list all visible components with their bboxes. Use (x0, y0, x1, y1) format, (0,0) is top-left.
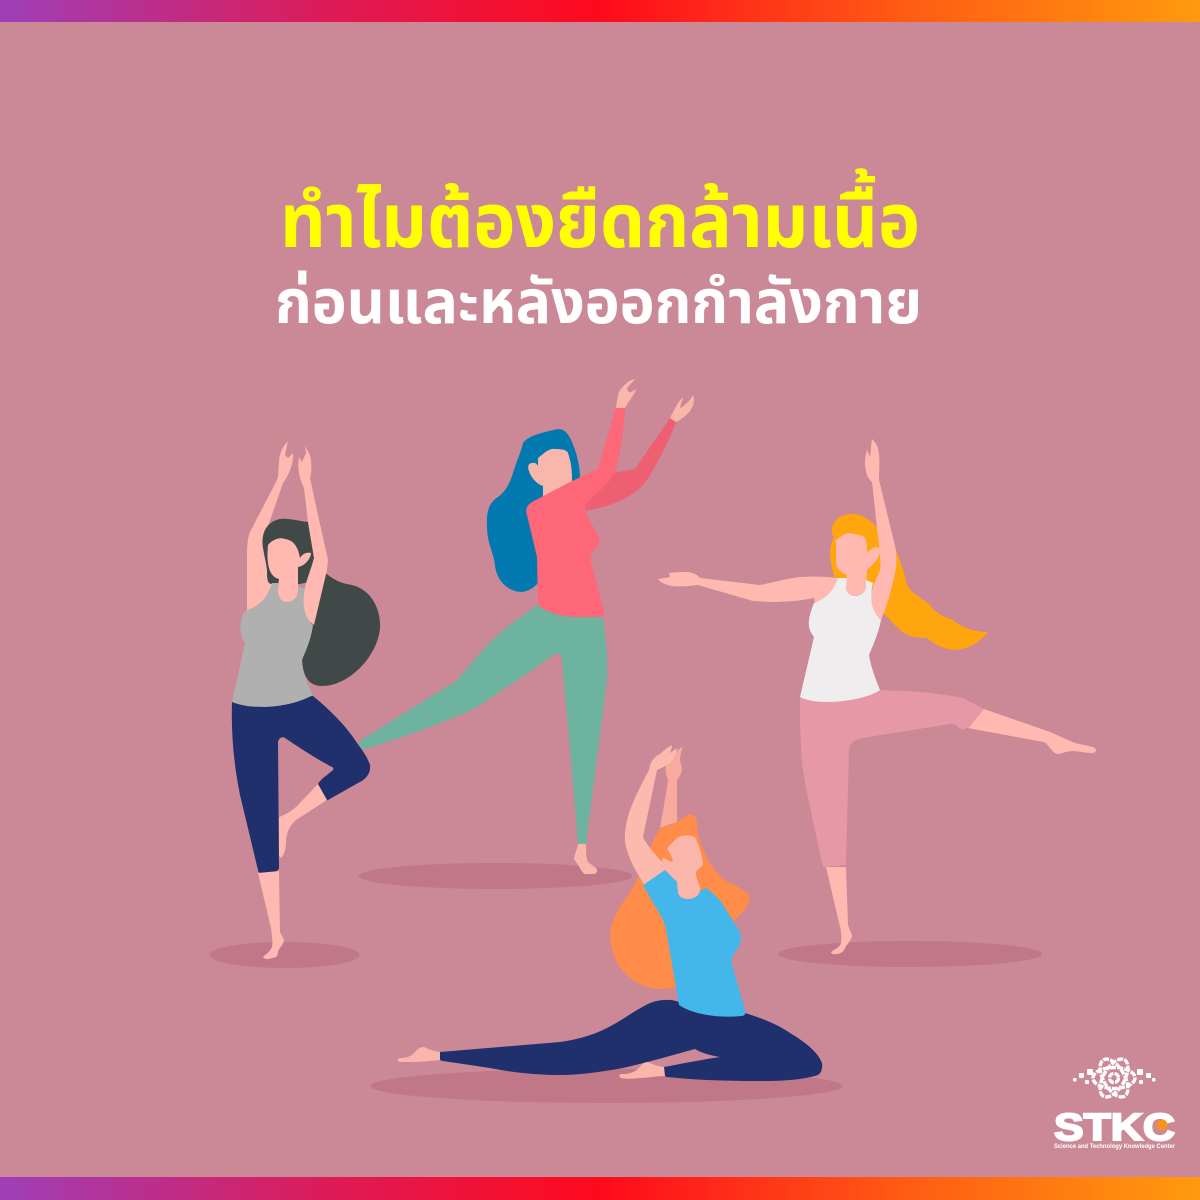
orange hair (830, 514, 988, 650)
logo: atom emblem (1093, 1055, 1135, 1101)
logo: tagline: Science and Technology Knowledge Center (1054, 1144, 1176, 1150)
title (275, 168, 922, 336)
bottom gradient bar (0, 1177, 1200, 1200)
face and ear (267, 538, 311, 602)
hair fringe (650, 816, 695, 862)
hair (487, 429, 580, 592)
pink leggings (800, 690, 984, 867)
figure: woman in white top and pink leggings (658, 439, 1096, 954)
figure: seated woman in blue top (398, 745, 822, 1081)
face and ear (528, 449, 572, 500)
face and neck (660, 835, 703, 899)
front arm (625, 745, 677, 886)
logo: STKC wordmark: STKC (1054, 1107, 1175, 1149)
back arm (584, 418, 676, 511)
right arm (298, 446, 328, 625)
face, neck and ear (836, 533, 880, 596)
white tank top (800, 578, 881, 702)
green leggings (358, 605, 607, 844)
left arm (247, 441, 293, 610)
title line 1: ทำไมต้องยืดกล้ามเนื้อ (280, 168, 920, 264)
floor shadows (210, 863, 1042, 1103)
navy leggings (440, 1000, 822, 1081)
standing leg (258, 871, 284, 959)
STKC logo (1054, 1055, 1176, 1150)
orange hair (610, 814, 749, 989)
standing foot (574, 844, 597, 874)
bent foot (279, 784, 327, 858)
top gradient bar (0, 0, 1200, 22)
figure: woman in coral top and green leggings (358, 379, 694, 874)
navy leggings (232, 696, 370, 873)
coral top (526, 408, 625, 618)
blue top (643, 870, 745, 1017)
left foot (398, 1047, 440, 1062)
back hand (670, 395, 694, 422)
side arm (658, 572, 838, 603)
raised arm (865, 439, 896, 620)
standing leg (826, 867, 852, 954)
raised leg (968, 709, 1096, 754)
logo: orange dot (1156, 1120, 1168, 1130)
grey tank top (232, 583, 313, 707)
back arm (660, 746, 683, 828)
figure: woman in grey top and navy leggings (232, 441, 380, 959)
title line 2: ก่อนและหลังออกกำลังกาย (275, 268, 922, 336)
front hand (616, 379, 636, 408)
right foot (619, 1062, 665, 1079)
long hair bun (302, 570, 380, 686)
logo: side dots (1073, 1069, 1156, 1084)
hair cap (263, 519, 318, 584)
